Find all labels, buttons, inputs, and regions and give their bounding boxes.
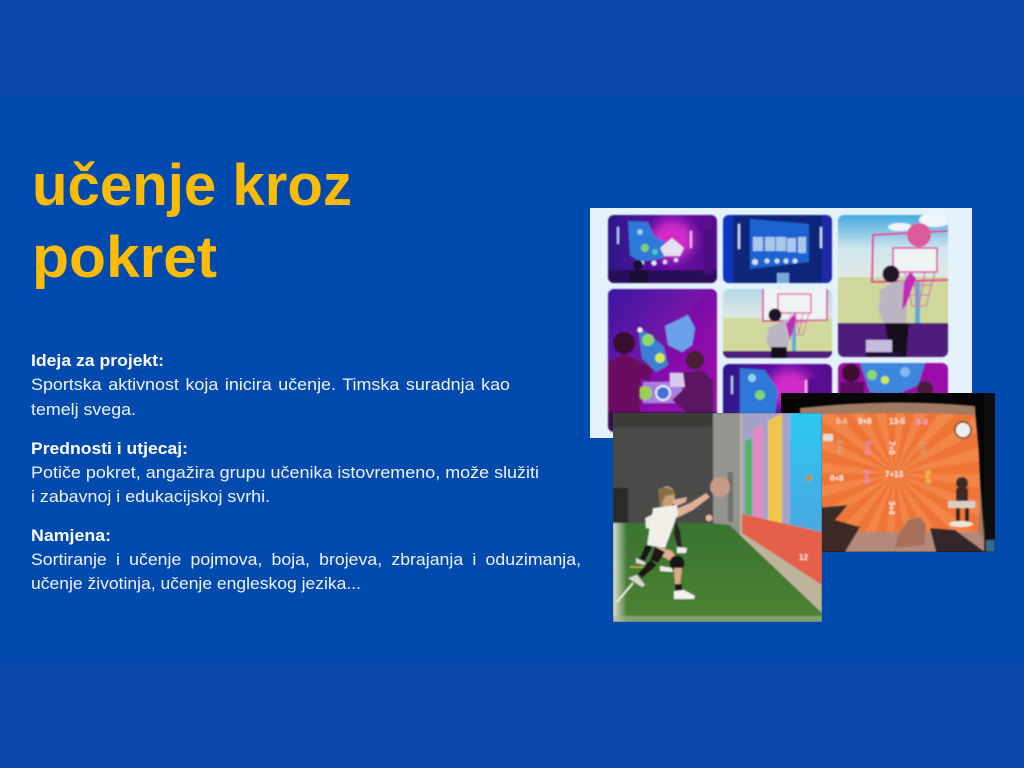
text block: ideja za projekt: Sportska aktivnost koja inicira učenje. Timska suradnja kao [31,376,510,394]
title: učenje kroz [32,153,352,218]
text block: prednosti i utjecaj: i zabavnoj i edukacijskoj svrhi. [31,488,270,506]
text block: namjena [31,527,581,593]
photo: orange math game wall: 2+5 [918,441,927,455]
photo: orange math game wall: 9+0 [923,470,932,484]
panel: photo collage [590,208,972,438]
text block: ideja za projekt: Ideja za projekt: [31,352,164,370]
photo: children throwing balls at projected wall: 12 [799,553,808,562]
text block: namjena: Namjena: [31,527,111,545]
photo: orange math game wall: 0+8 [830,474,844,483]
photo: children throwing balls at projected wall [613,413,822,622]
text block: prednosti i utjecaj: Prednosti i utjecaj: [31,440,188,458]
title [32,153,352,290]
text block: prednosti i utjecaj [31,440,539,506]
photo: orange math game wall [781,393,995,552]
photo: orange math game wall: 13-5 [889,417,906,426]
photo: orange math game wall: 6+4 [835,440,844,454]
text block: prednosti i utjecaj: Potiče pokret, angažira grupu učenika istovremeno, može služiti [31,464,539,482]
text block: namjena: Sortiranje i učenje pojmova, boja, brojeva, zbrajanja i oduzimanja, [31,551,581,569]
photo: orange math game wall: 5+3 [863,441,872,455]
photo: orange math game wall: 8+9 [862,470,871,484]
photo: orange math game wall: 8-6 [836,417,848,426]
text block: ideja za projekt: temelj svega. [31,401,136,419]
text block: ideja za projekt [31,352,510,419]
photo: orange math game wall: 7+0 [887,441,896,455]
photo: orange math game wall: 9-9 [916,418,928,427]
title: pokret [32,225,217,290]
photo: orange math game wall: 7+13 [885,470,904,479]
photo: orange math game wall: 9+8 [858,417,872,426]
photo: orange math game wall: 3+4 [887,501,896,515]
text block: namjena: učenje životinja, učenje engleskog jezika... [31,575,361,593]
